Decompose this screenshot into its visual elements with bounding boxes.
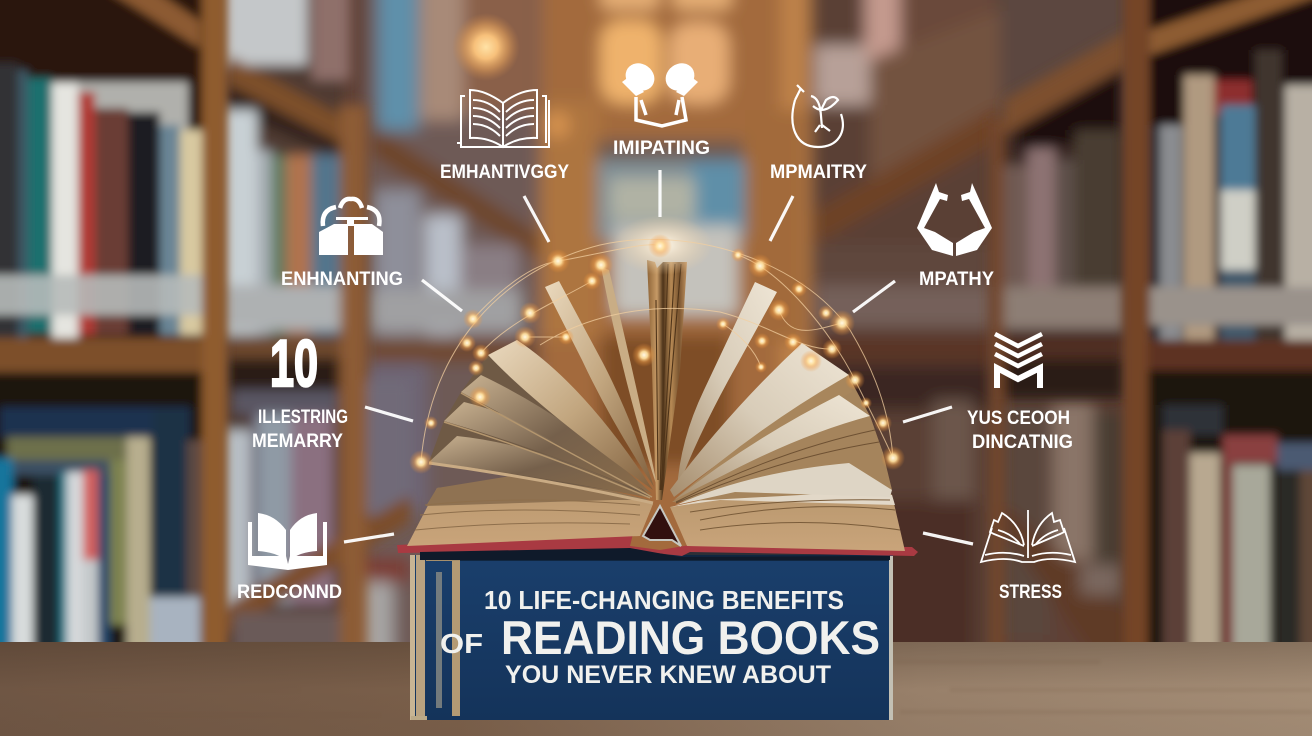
title line 2: READING BOOKS: [501, 611, 880, 664]
left section two: [225, 0, 343, 660]
title line 1: 10 LIFE-CHANGING BENEFITS: [484, 585, 844, 615]
left near section upper: [0, 0, 205, 360]
label: ENHNANTING: [281, 269, 403, 290]
label line two: MEMARRY: [252, 431, 343, 452]
icon: open book outline: [457, 90, 549, 147]
spine gap: [643, 506, 681, 546]
icon: open book outline: [981, 510, 1075, 562]
right leaf four: [676, 463, 892, 505]
right fan base: [672, 377, 892, 502]
title OF: OF: [440, 628, 483, 659]
left near section lower: [0, 372, 202, 672]
left pillar: [202, 0, 227, 670]
left leaf two: [488, 340, 653, 490]
title line 3: YOU NEVER KNEW ABOUT: [505, 661, 831, 689]
benefit: Stress: [923, 510, 1075, 603]
left thin leaf: [601, 267, 658, 490]
benefit: Yus Ceooh Dincatnig: [903, 334, 1073, 453]
left page block: [407, 476, 653, 546]
glow at top of book: [613, 215, 713, 275]
right leaf two: [670, 343, 849, 497]
label line one: YUS CEOOH: [967, 408, 1070, 429]
left leaf three: [461, 375, 652, 494]
right leaf one: [677, 282, 777, 490]
connector line: [344, 534, 394, 542]
benefit: Imipating: [613, 58, 710, 217]
icon: stacked chevrons: [995, 334, 1042, 388]
label: MPATHY: [919, 269, 994, 290]
label: IMIPATING: [613, 138, 710, 159]
fairy lights: [409, 234, 905, 474]
connector line: [658, 170, 662, 217]
connector line: [365, 407, 413, 421]
connector line: [524, 196, 549, 242]
icon: solid open book: [248, 513, 327, 570]
icon: two bulbs over a book: [620, 58, 700, 126]
left fan base: [429, 355, 652, 497]
lamps: [600, 20, 662, 104]
right leaf three edge: [674, 416, 883, 503]
left pillar two: [340, 105, 367, 665]
right mid section: [810, 0, 1000, 680]
left leaf four: [444, 402, 650, 495]
label: MPMAITRY: [770, 162, 867, 183]
connector line: [923, 533, 973, 544]
label: STRESS: [999, 582, 1062, 603]
blue spine book with title: [410, 551, 893, 720]
right leaf two edge: [674, 375, 852, 500]
benefit: Mpmaitry: [770, 85, 867, 241]
benefit: Illestring Memarry: [252, 326, 413, 452]
far right pillar: [990, 120, 1004, 660]
open book with fanned pages: [397, 260, 918, 560]
left section three: [365, 0, 540, 680]
label: EMHANTIVGGY: [440, 162, 569, 183]
right pillar: [1124, 0, 1149, 670]
bright lamp at upper left: [452, 13, 520, 81]
back window: [597, 140, 743, 170]
icon: bird in circle: [792, 85, 843, 147]
icon: number 10: 10: [270, 326, 318, 400]
label line one: ILLESTRING: [258, 407, 348, 428]
right section two: [1004, 65, 1125, 340]
label: REDCONND: [237, 582, 342, 603]
wooden table: [0, 642, 1312, 736]
right near section upper: [1150, 0, 1312, 370]
fairy light arcs: [421, 239, 893, 462]
icon: open hands: [917, 183, 992, 256]
red cover: [397, 534, 918, 560]
right leaf three: [674, 395, 870, 500]
connector line: [903, 407, 952, 422]
left leaf five: [429, 436, 650, 498]
blurred library background: mid shelves: [220, 0, 1128, 665]
left leaf one: [545, 281, 654, 487]
benefit: Redconnd: [237, 513, 394, 603]
connector line: [853, 281, 895, 312]
icon: gift box: [319, 199, 383, 255]
benefit: Mpathy: [853, 183, 994, 312]
benefit: Enhnanting: [281, 199, 462, 311]
connector line: [422, 280, 462, 311]
benefit: Emhantiviggy: [440, 90, 569, 242]
right near section lower: [1148, 370, 1312, 670]
centre pages: [647, 260, 687, 500]
spine gold bands: [410, 555, 893, 720]
right page block: [670, 488, 905, 551]
label line two: DINCATNIG: [972, 432, 1073, 453]
warm central aisle: [535, 0, 810, 680]
connector line: [770, 196, 793, 241]
